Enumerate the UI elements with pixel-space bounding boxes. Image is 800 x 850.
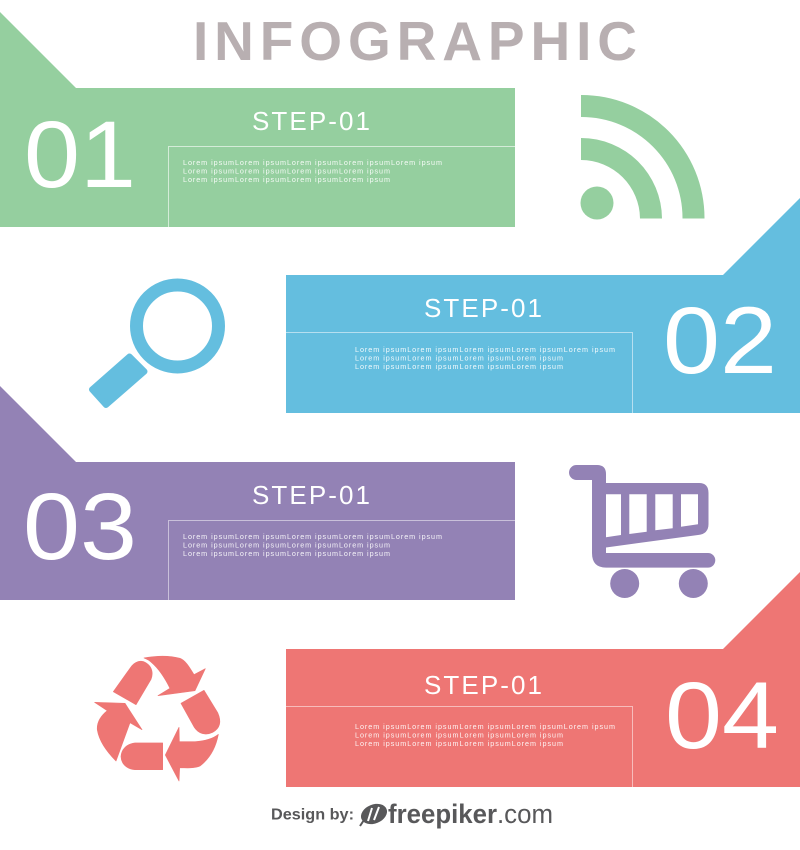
body text: Lorem ipsumLorem ipsumLorem ipsumLorem ipsum <box>183 175 390 184</box>
body text: Lorem ipsumLorem ipsumLorem ipsumLorem ipsumLorem ipsum <box>355 722 615 731</box>
number 01: 01 <box>24 102 136 208</box>
text box outline <box>168 146 515 227</box>
design by label: Design by: <box>271 806 354 824</box>
step heading: STEP-01 <box>252 106 370 136</box>
body text: Lorem ipsumLorem ipsumLorem ipsumLorem ipsum <box>183 549 390 558</box>
icon: rss signal <box>580 95 705 220</box>
number 02: 02 <box>663 288 777 394</box>
body text <box>183 158 442 184</box>
step heading: STEP-01 <box>424 670 542 700</box>
text box outline <box>286 706 632 787</box>
body text: Lorem ipsumLorem ipsumLorem ipsumLorem ipsumLorem ipsum <box>183 532 442 541</box>
icon: recycle <box>95 656 220 781</box>
body text <box>183 532 442 558</box>
footer credit <box>271 799 553 829</box>
step heading: STEP-01 <box>252 480 370 510</box>
body text: Lorem ipsumLorem ipsumLorem ipsumLorem ipsum <box>355 739 563 748</box>
body text: Lorem ipsumLorem ipsumLorem ipsumLorem ipsumLorem ipsum <box>355 345 615 354</box>
panel: step 04 <box>286 572 800 787</box>
text box outline <box>286 332 632 413</box>
title: INFOGRAPHIC <box>193 10 637 72</box>
body text: Lorem ipsumLorem ipsumLorem ipsumLorem ipsum <box>355 730 563 740</box>
text box outline <box>168 520 515 600</box>
body text <box>355 345 615 371</box>
icon: leaf logo <box>358 800 390 828</box>
panel: step 01 <box>0 12 515 227</box>
panel background: red <box>286 572 800 787</box>
dot com: .com <box>497 799 553 829</box>
panel background: purple <box>0 386 515 600</box>
number 03: 03 <box>23 474 137 580</box>
step heading: STEP-01 <box>424 293 542 323</box>
body text <box>355 722 615 748</box>
body text: Lorem ipsumLorem ipsumLorem ipsumLorem ipsum <box>355 362 563 371</box>
body text: Lorem ipsumLorem ipsumLorem ipsumLorem ipsum <box>183 166 390 176</box>
panel background: green <box>0 12 515 227</box>
panel: step 03 <box>0 386 515 600</box>
panel background: blue <box>286 198 800 413</box>
body text: Lorem ipsumLorem ipsumLorem ipsumLorem ipsumLorem ipsum <box>183 158 442 167</box>
freepiker wordmark: freepiker <box>388 799 497 829</box>
body text: Lorem ipsumLorem ipsumLorem ipsumLorem ipsum <box>183 540 390 550</box>
number 04: 04 <box>665 663 779 769</box>
panel: step 02 <box>286 198 800 413</box>
body text: Lorem ipsumLorem ipsumLorem ipsumLorem ipsum <box>355 354 563 362</box>
icon: magnifying glass <box>92 285 218 405</box>
icon: shopping cart <box>569 465 715 598</box>
